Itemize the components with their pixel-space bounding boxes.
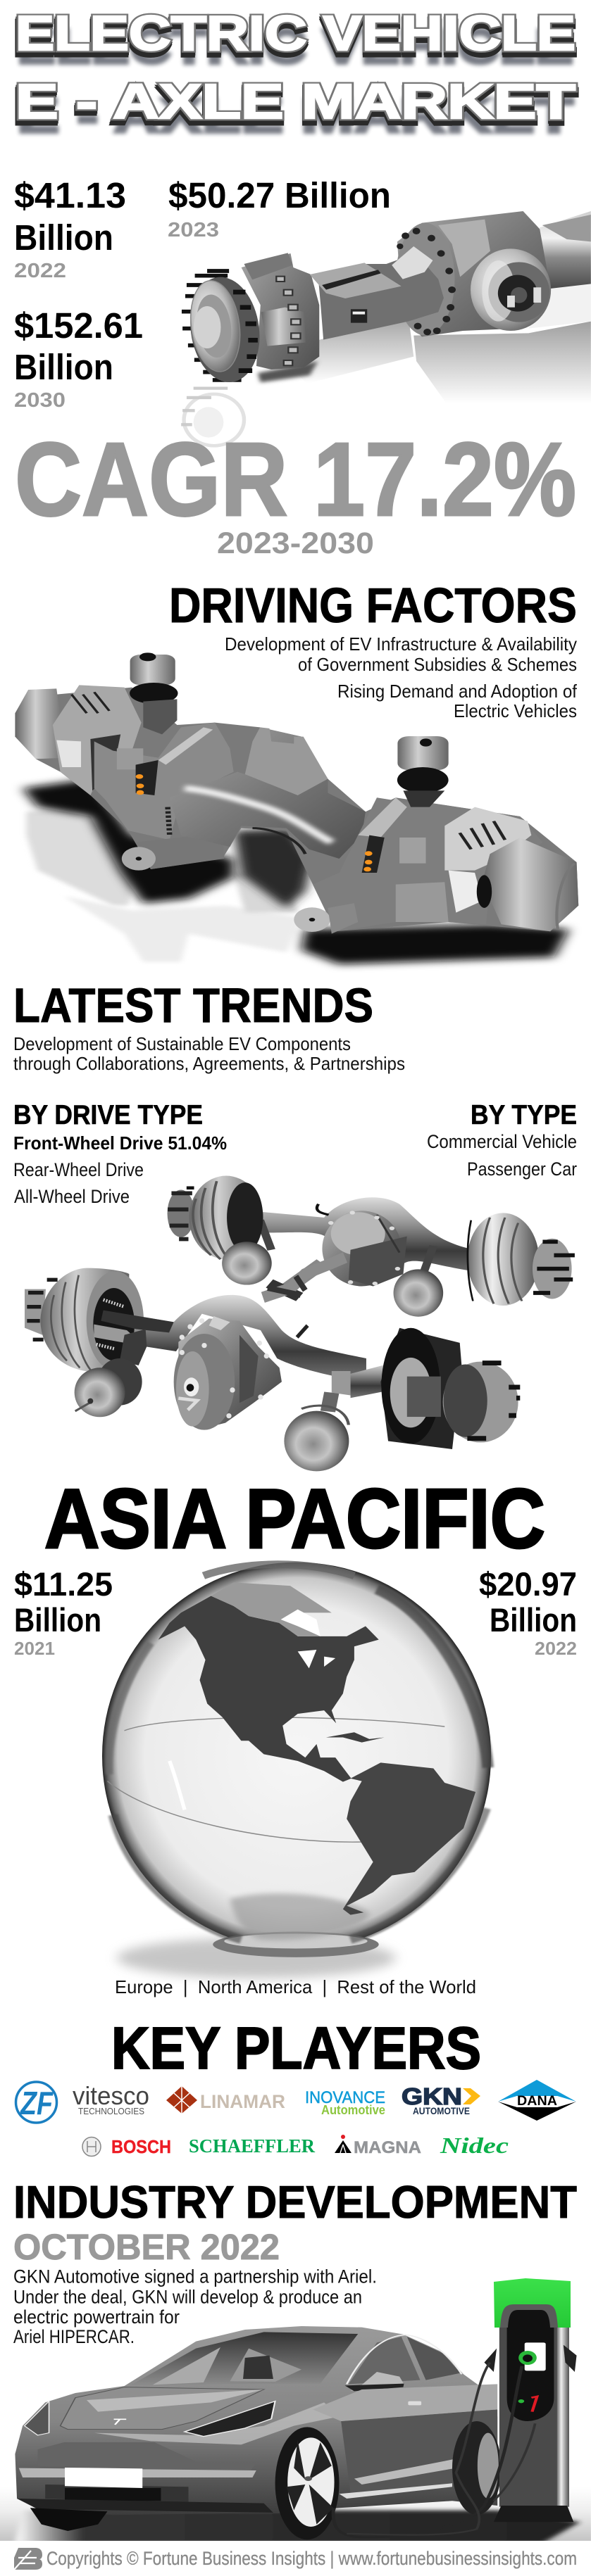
right beam bbox=[540, 211, 591, 289]
logo: Inovance bbox=[305, 2088, 385, 2117]
charger green cap bbox=[494, 2278, 571, 2328]
logo: Vitesco: vitesco bbox=[73, 2081, 149, 2110]
heading: LATEST TRENDS bbox=[13, 978, 373, 1033]
title line 2: E - AXLE MARKET bbox=[15, 74, 576, 129]
market size figures: 2023 bbox=[168, 219, 219, 241]
description: Under the deal, GKN will develop & produce an bbox=[13, 2286, 362, 2307]
right air spring bbox=[397, 736, 449, 807]
logo: GKN bbox=[402, 2083, 480, 2116]
market size figures: Billion bbox=[14, 347, 113, 387]
driving factors bbox=[169, 578, 578, 721]
title line 1: ELECTRIC VEHICLE bbox=[15, 6, 576, 61]
side windows bbox=[349, 2337, 421, 2384]
front wheel bbox=[275, 2427, 339, 2539]
image: electric car and charger bbox=[0, 2326, 591, 2543]
right hub bbox=[483, 838, 578, 931]
title bbox=[14, 6, 576, 143]
logo: Inovance: INOVANCE bbox=[305, 2088, 385, 2107]
motor housing bbox=[397, 211, 553, 336]
logo: Magna bbox=[335, 2135, 421, 2157]
logo: Dana: DANA bbox=[517, 2094, 557, 2109]
logo: Bosch bbox=[82, 2136, 171, 2157]
hub disc bbox=[185, 274, 266, 385]
left gearbox bbox=[94, 723, 234, 840]
flange bolts bbox=[397, 228, 456, 335]
regional values: 2022 bbox=[535, 1638, 577, 1659]
badge bbox=[114, 2419, 126, 2425]
logo: Dana bbox=[498, 2080, 576, 2121]
industry development bbox=[13, 2176, 577, 2347]
key player logos bbox=[15, 2080, 576, 2158]
left hub bbox=[15, 688, 66, 759]
market size figures: 2022 bbox=[14, 260, 66, 282]
by type bbox=[427, 1100, 577, 1180]
left brake bbox=[53, 685, 142, 795]
drum bolts bbox=[276, 277, 300, 365]
market size figures: Billion bbox=[14, 217, 113, 258]
rear axle bbox=[168, 1176, 575, 1317]
logo: Schaeffler: SCHAEFFLER bbox=[189, 2135, 315, 2157]
market size figures bbox=[14, 175, 391, 412]
number plate bbox=[65, 2468, 142, 2488]
footer bbox=[14, 2548, 577, 2570]
mounting foot bbox=[294, 907, 330, 932]
driver 2: Electric Vehicles bbox=[454, 700, 577, 721]
regional values: Billion bbox=[14, 1601, 101, 1639]
car body bbox=[15, 2326, 497, 2515]
title line 1: ELECTRIC VEHICLE bbox=[14, 11, 576, 65]
date: OCTOBER 2022 bbox=[13, 2227, 280, 2267]
image: e-axle hero bbox=[181, 211, 591, 446]
logo: Vitesco: TECHNOLOGIES bbox=[78, 2106, 144, 2116]
rear wheel bbox=[452, 2421, 502, 2515]
market size figures: 2030 bbox=[14, 389, 66, 412]
trend text: through Collaborations, Agreements, & Partnerships bbox=[13, 1053, 405, 1074]
heading: ASIA PACIFIC bbox=[44, 1472, 545, 1566]
by drive type: BY DRIVE TYPE bbox=[13, 1100, 203, 1130]
logo: Linamar: LINAMAR bbox=[200, 2091, 285, 2112]
side holsters bbox=[564, 2345, 577, 2372]
axle beam bbox=[318, 258, 444, 340]
logo: Inovance: Automotive bbox=[321, 2103, 385, 2117]
by drive type bbox=[13, 1100, 227, 1207]
hub teeth bbox=[182, 271, 242, 380]
title line 2 bbox=[14, 74, 576, 143]
value 2021: $11.25 bbox=[14, 1565, 113, 1603]
right brake bbox=[444, 807, 531, 871]
title line 2: E - AXLE MARKET bbox=[14, 79, 576, 134]
latitude lines bbox=[107, 1717, 444, 1842]
logo: Bosch: BOSCH bbox=[111, 2136, 171, 2157]
north america bbox=[158, 1596, 379, 1782]
footer logo bbox=[14, 2548, 42, 2570]
by drive type: Rear-Wheel Drive bbox=[13, 1159, 144, 1180]
driver 2 bbox=[337, 681, 578, 721]
drum bbox=[40, 1268, 129, 1371]
key players heading: KEY PLAYERS bbox=[111, 2015, 481, 2081]
regional values bbox=[14, 1565, 577, 1659]
other regions: Europe | North America | Rest of the World bbox=[115, 1976, 476, 1997]
latest trends bbox=[13, 978, 405, 1074]
drum bbox=[242, 253, 319, 370]
description bbox=[13, 2266, 377, 2347]
right unit bbox=[313, 797, 542, 931]
hudson bay and lakes bbox=[281, 1610, 335, 1668]
charger bbox=[333, 2278, 577, 2537]
title line 1: ELECTRIC VEHICLE bbox=[15, 8, 576, 63]
trend text bbox=[13, 1033, 405, 1074]
charger post bbox=[499, 2316, 569, 2507]
bumper and fascia bbox=[38, 2442, 175, 2452]
value 2022: $41.13 bbox=[14, 175, 126, 215]
axle stub bbox=[94, 1325, 146, 1346]
logo: ZF: ZF bbox=[19, 2085, 54, 2121]
logo: GKN: GKN bbox=[402, 2083, 462, 2109]
left air spring bbox=[130, 652, 178, 734]
hub bbox=[25, 1289, 46, 1335]
front axle right half bbox=[284, 1328, 520, 1471]
by type: Passenger Car bbox=[467, 1158, 577, 1180]
description: GKN Automotive signed a partnership with Ariel. bbox=[13, 2266, 377, 2287]
differential casing bbox=[178, 1318, 282, 1429]
value 2022: $20.97 bbox=[479, 1565, 577, 1603]
title line 2: E - AXLE MARKET bbox=[17, 88, 573, 143]
chamber bbox=[97, 1358, 142, 1406]
rim highlight bbox=[170, 1761, 185, 1810]
axle silhouette bbox=[36, 688, 578, 931]
value 2030: $152.61 bbox=[14, 305, 143, 346]
ground shadow bbox=[0, 2499, 591, 2541]
logo: GKN: AUTOMOTIVE bbox=[413, 2105, 470, 2116]
bracket bbox=[120, 1329, 147, 1365]
orange connectors right bbox=[363, 851, 373, 871]
driver 1 bbox=[225, 633, 577, 675]
logo: Nidec: Nidec bbox=[440, 2133, 509, 2158]
regional values: Billion bbox=[490, 1601, 577, 1639]
regional values: 2021 bbox=[14, 1638, 55, 1659]
left front tyre bbox=[30, 2508, 107, 2531]
reflection bbox=[181, 284, 591, 446]
charger screen bbox=[507, 2325, 554, 2421]
by drive type: Front-Wheel Drive 51.04% bbox=[13, 1132, 227, 1154]
caribbean bbox=[326, 1732, 385, 1743]
front axle left half bbox=[25, 1258, 366, 1430]
windshield bbox=[130, 2332, 358, 2385]
by type: Commercial Vehicle bbox=[427, 1131, 577, 1152]
image: tandem e-axle bbox=[15, 652, 578, 964]
title line 2: E - AXLE MARKET bbox=[15, 74, 576, 129]
trend text: Development of Sustainable EV Components bbox=[13, 1033, 351, 1054]
beam bbox=[92, 1295, 366, 1382]
by drive type: All-Wheel Drive bbox=[14, 1186, 130, 1207]
front motor disc bbox=[471, 248, 551, 331]
orange connectors bbox=[136, 774, 144, 795]
logo: Linamar bbox=[166, 2086, 285, 2114]
headlights bbox=[25, 2401, 49, 2435]
title line 1 bbox=[14, 6, 576, 74]
description: Ariel HIPERCAR. bbox=[13, 2326, 135, 2347]
globe shadow bbox=[117, 1938, 396, 1978]
by type: BY TYPE bbox=[471, 1100, 577, 1130]
car flank bbox=[341, 2409, 497, 2493]
title line 1: ELECTRIC VEHICLE bbox=[15, 6, 576, 61]
cables bbox=[333, 2366, 522, 2537]
value 2023: $50.27 Billion bbox=[168, 175, 391, 215]
title line 1: ELECTRIC VEHICLE bbox=[17, 19, 573, 74]
image: glass globe bbox=[102, 1562, 491, 1978]
shaft bbox=[263, 1258, 345, 1297]
shadows and reflection bbox=[23, 779, 569, 964]
driver 2: Rising Demand and Adoption of bbox=[337, 681, 578, 702]
segmentation bbox=[13, 1100, 577, 1207]
heading: INDUSTRY DEVELOPMENT bbox=[13, 2176, 577, 2228]
image: twin drive axles bbox=[25, 1176, 575, 1471]
CAGR period: 2023-2030 bbox=[217, 526, 374, 560]
south america bbox=[343, 1762, 475, 1915]
front fender highlight bbox=[94, 2402, 339, 2444]
title line 2: E - AXLE MARKET bbox=[15, 77, 576, 132]
left arm bbox=[136, 833, 224, 869]
description: electric powertrain for bbox=[13, 2306, 180, 2328]
central beam bbox=[170, 727, 366, 859]
globe sphere bbox=[102, 1562, 491, 1950]
logo: Magna: MAGNA bbox=[354, 2138, 421, 2157]
hood bbox=[61, 2387, 263, 2430]
